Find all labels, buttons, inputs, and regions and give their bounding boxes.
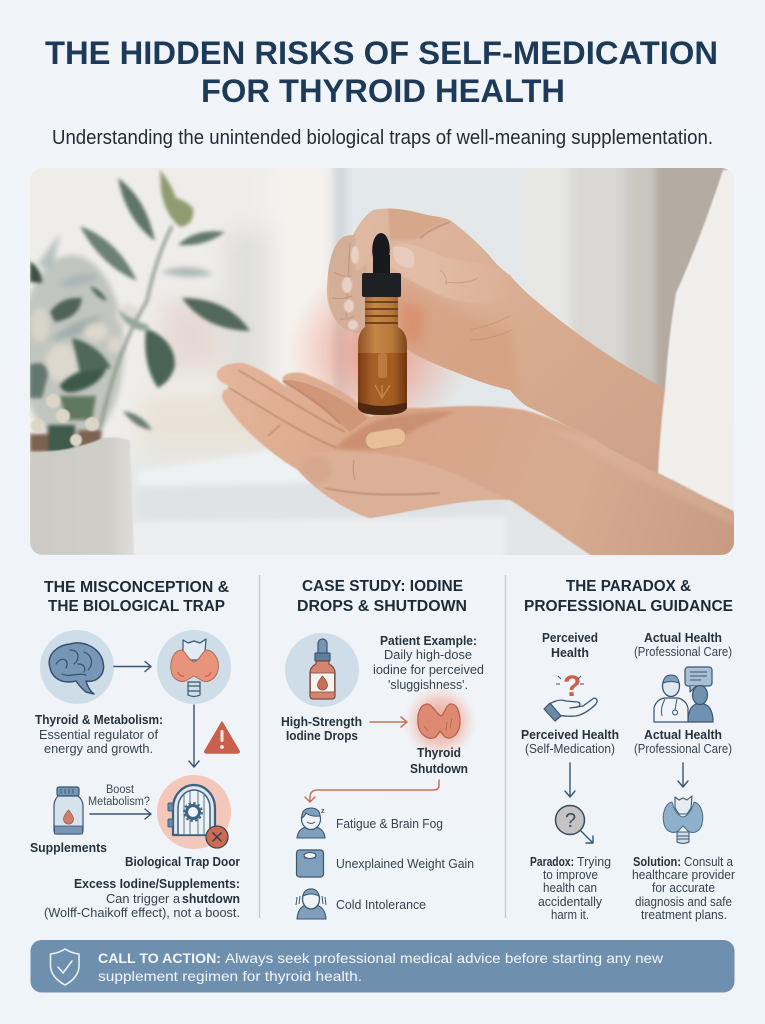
heading: paradox: PROFESSIONAL GUIDANCE <box>524 598 733 615</box>
text: call to action: Always seek professional medical advice before starting any new <box>225 950 664 966</box>
icon: warning triangle <box>205 722 239 753</box>
photo: potted plant <box>20 170 250 555</box>
title: FOR THYROID HEALTH <box>201 73 565 109</box>
icon: cold intolerance person <box>296 889 326 919</box>
label: boost metabolism: Boost <box>106 784 135 796</box>
icon: shield check <box>50 949 79 985</box>
arrow: actual down <box>678 763 688 787</box>
text: fatigue and brain fog: Fatigue & Brain Fog <box>336 817 443 831</box>
text: patient example: 'sluggishness'. <box>388 678 468 692</box>
label: actual health top: Actual Health <box>644 631 722 645</box>
arrow: thyroid to trap door <box>189 705 199 767</box>
heading: case study: DROPS & SHUTDOWN <box>297 598 467 615</box>
photo background: window and curtains <box>10 150 745 560</box>
arrow: brain to thyroid <box>114 662 151 672</box>
label: high-strength iodine drops: Iodine Drops <box>286 729 358 743</box>
text: excess iodine warning: Excess Iodine/Supplements: <box>74 877 240 891</box>
label: actual health top <box>634 631 732 659</box>
icon: biological trap door <box>157 775 231 849</box>
photo: upper hand holding dropper <box>320 200 670 485</box>
icon: magnifier question: ? <box>565 810 576 832</box>
photo: lower cupped hand <box>217 363 736 558</box>
title <box>45 35 718 109</box>
text: solution: for accurate <box>652 881 715 895</box>
arrow: perceived down <box>565 763 575 797</box>
arrow: supplements to trap door <box>90 809 151 819</box>
text: paradox: Paradox: <box>530 855 574 869</box>
text: unexplained weight gain: Unexplained Weight Gain <box>336 857 474 871</box>
panel: the misconception and biological trap <box>30 579 240 920</box>
label: perceived health self-medication: Perceived Health <box>521 728 619 742</box>
label: biological trap door: Biological Trap Door <box>125 855 240 869</box>
icon: weight scale <box>296 850 324 877</box>
title: THE HIDDEN RISKS OF SELF-MEDICATION <box>45 35 718 71</box>
text: thyroid and metabolism: Thyroid & Metabolism: <box>35 713 163 727</box>
label: thyroid shutdown <box>410 746 468 776</box>
heading: misconception <box>44 579 229 615</box>
text: paradox: accidentally <box>538 895 603 909</box>
arrow: drops to thyroid shutdown <box>370 717 407 727</box>
text: paradox: harm it. <box>551 908 589 922</box>
label: actual health professional care: Actual Health <box>644 728 722 742</box>
text: thyroid and metabolism: energy and growth. <box>44 742 153 756</box>
photo: red glow <box>294 289 458 417</box>
label: high-strength iodine drops <box>281 715 362 743</box>
text: patient example: iodine for perceived <box>373 663 484 677</box>
label: perceived health top <box>542 631 598 660</box>
icon: brain <box>40 630 114 704</box>
photo: capsule <box>366 428 406 449</box>
heading: misconception: THE MISCONCEPTION & <box>44 579 229 596</box>
text: call to action <box>98 950 664 984</box>
text: call to action: CALL TO ACTION: <box>98 950 221 966</box>
icon: hand with question mark <box>544 670 597 721</box>
text: paradox: to improve <box>543 868 598 882</box>
icon: iodine drops bottle <box>285 633 359 707</box>
text: paradox: health can <box>543 881 597 895</box>
icon: hand with question mark: ? <box>563 670 581 703</box>
photo: amber dropper bottle <box>358 233 407 415</box>
label: perceived health self-medication: (Self-Medication) <box>525 742 615 756</box>
text: excess iodine warning: Can trigger a <box>106 892 180 906</box>
label: actual health top: (Professional Care) <box>634 645 732 659</box>
icon: inflamed thyroid <box>403 685 477 759</box>
text: thyroid and metabolism <box>35 713 163 756</box>
text: solution: Consult a <box>684 855 733 869</box>
icon: magnifier question <box>556 806 593 843</box>
photo: white sleeve <box>658 170 740 530</box>
label: perceived health top: Health <box>551 646 589 660</box>
icon: fatigue person: z <box>321 808 325 815</box>
text: patient example: Patient Example: <box>380 634 477 648</box>
text: call to action: supplement regimen for thyroid health. <box>98 968 362 984</box>
icon: doctor and patient <box>654 667 713 722</box>
heading: paradox: THE PARADOX & <box>566 578 691 595</box>
text: paradox: Trying <box>577 855 611 869</box>
heading: case study: CASE STUDY: IODINE <box>302 578 463 595</box>
text: paradox <box>530 855 611 922</box>
text: patient example: Daily high-dose <box>384 648 472 662</box>
label: boost metabolism: Metabolism? <box>88 796 150 808</box>
text: solution: diagnosis and safe <box>635 895 732 909</box>
text: patient example <box>373 634 484 692</box>
heading: case study <box>297 578 467 615</box>
subtitle: Understanding the unintended biological traps of well-meaning supplementation. <box>52 127 713 149</box>
label: thyroid shutdown: Thyroid <box>417 746 461 760</box>
label: supplements: Supplements <box>30 841 107 855</box>
hero photo: hands with iodine dropper bottle <box>10 150 745 560</box>
text: thyroid and metabolism: Essential regulator of <box>39 728 159 742</box>
text: cold intolerance: Cold Intolerance <box>336 898 426 912</box>
heading: misconception: THE BIOLOGICAL TRAP <box>48 598 225 615</box>
label: high-strength iodine drops: High-Strength <box>281 715 362 729</box>
icon: healthy thyroid <box>663 796 703 844</box>
icon: thyroid gland <box>157 630 231 704</box>
panel: case study <box>281 578 484 919</box>
panel: paradox and professional guidance <box>521 578 735 922</box>
icon: supplement bottle <box>54 787 83 834</box>
text: excess iodine warning <box>44 877 240 920</box>
label: actual health professional care <box>634 728 732 756</box>
text: solution: Solution: <box>633 855 681 869</box>
label: actual health professional care: (Professional Care) <box>634 742 732 756</box>
text: solution: healthcare provider <box>632 868 735 882</box>
text: solution <box>632 855 735 922</box>
call to action banner <box>30 940 734 992</box>
arrow: shutdown to symptoms <box>305 780 439 802</box>
label: perceived health self-medication <box>521 728 619 756</box>
heading: paradox <box>524 578 733 615</box>
label: perceived health top: Perceived <box>542 631 598 645</box>
text: solution: treatment plans. <box>641 908 727 922</box>
icon: fatigue person <box>297 808 325 838</box>
label: thyroid shutdown: Shutdown <box>410 762 468 776</box>
text: excess iodine warning: (Wolff-Chaikoff effect), not a boost. <box>44 906 240 920</box>
label: boost metabolism <box>88 784 150 808</box>
text: excess iodine warning: shutdown <box>182 892 240 906</box>
